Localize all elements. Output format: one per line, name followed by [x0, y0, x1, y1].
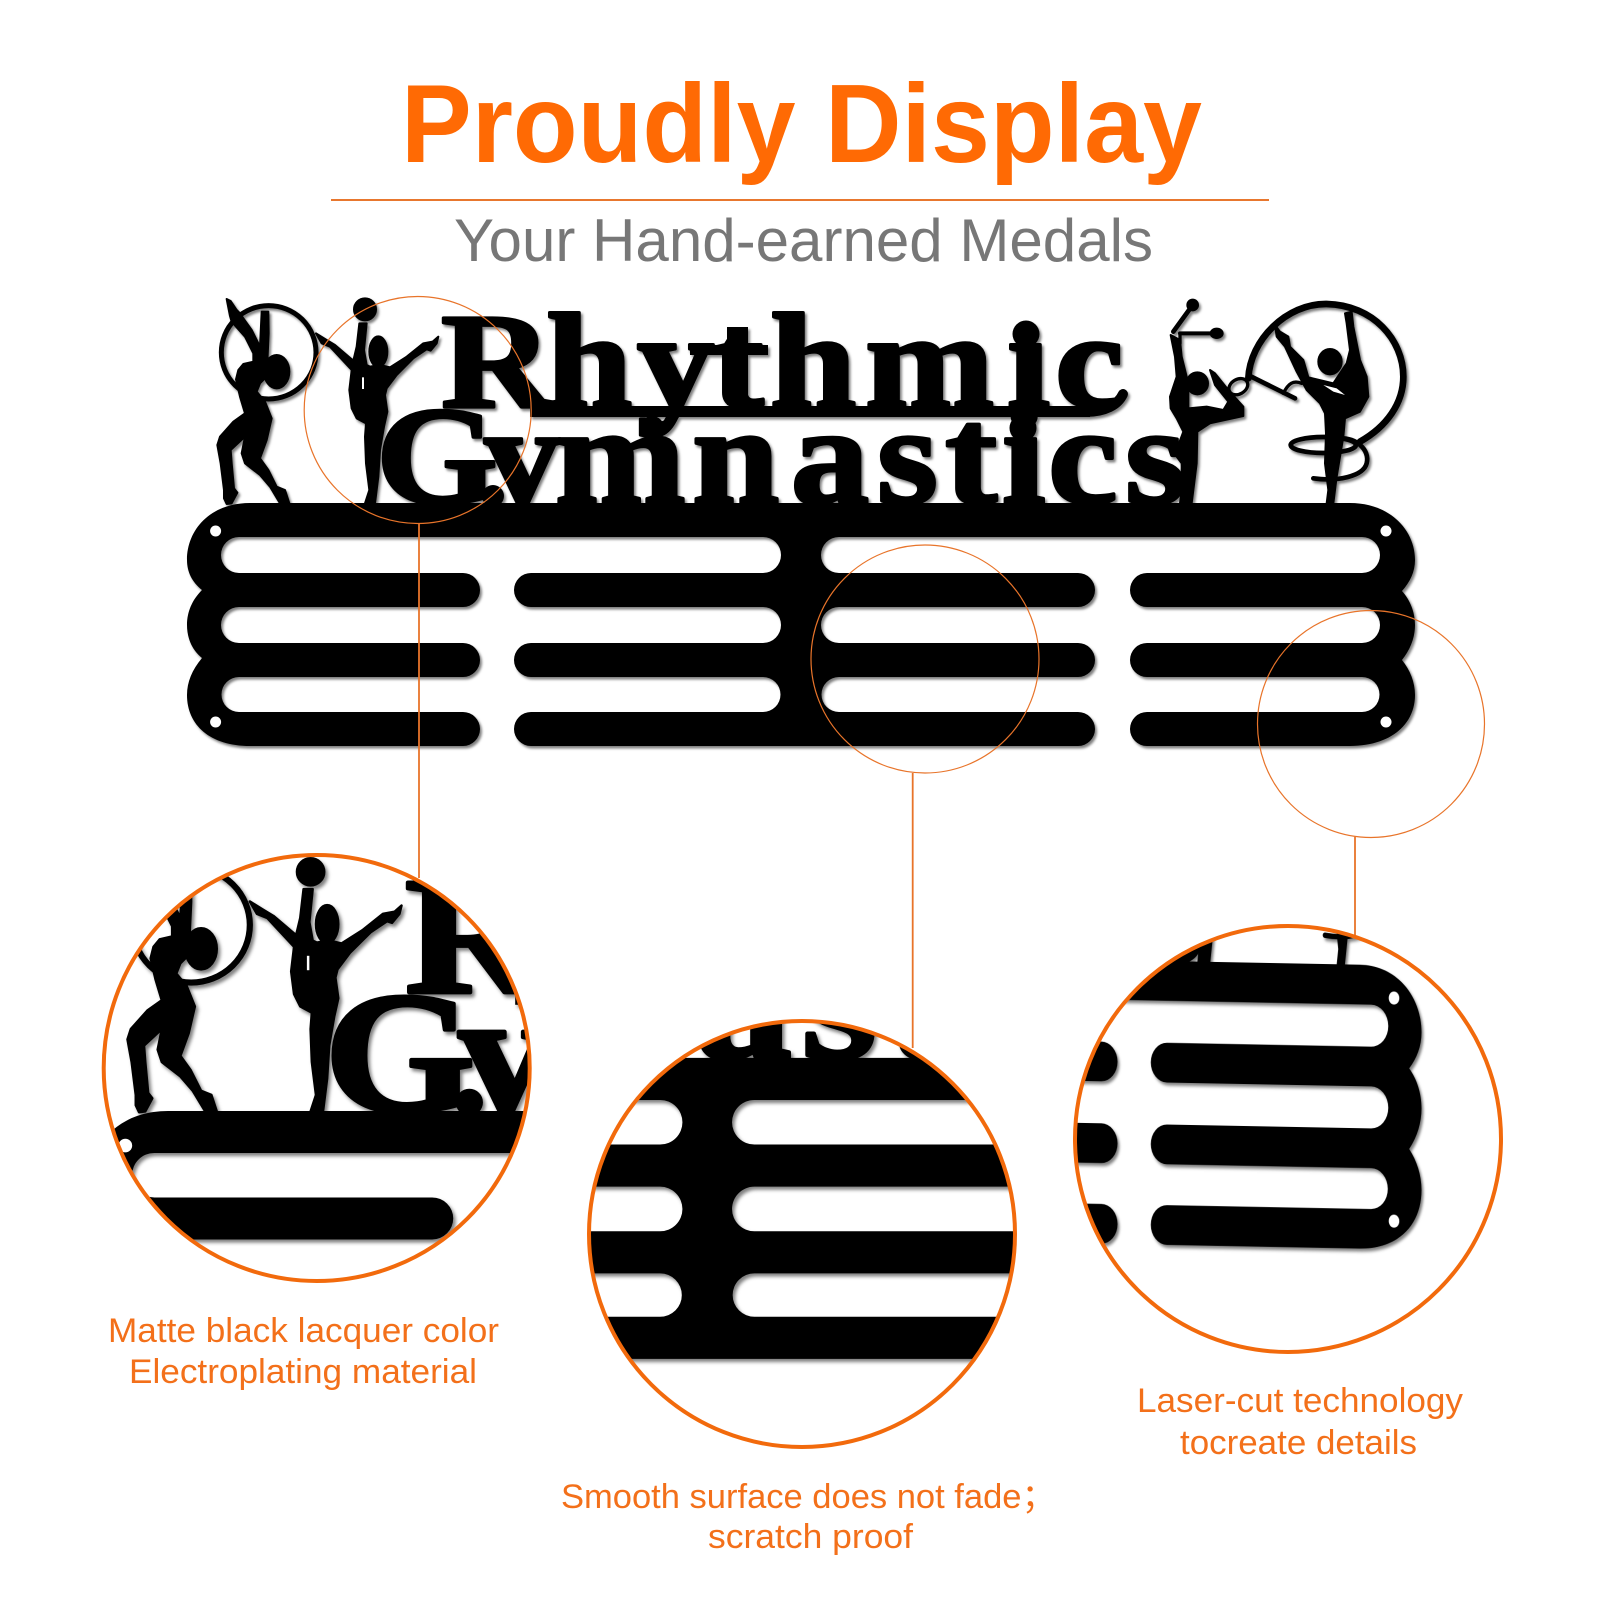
zoom circle: laser-cut edge: Rhythmic — [496, 695, 1145, 884]
caption: matte black: Electroplating material — [129, 1353, 477, 1391]
caption: smooth surface — [561, 1478, 1056, 1556]
medal hanger product image: Rhythmic — [441, 286, 1124, 437]
callout: circle and leader line, bars detail — [811, 545, 1039, 1048]
subtitle: Your Hand-earned Medals — [454, 207, 1153, 274]
callout: circle and leader line, edge detail — [1258, 610, 1484, 937]
medal hanger product image — [187, 286, 1415, 746]
zoom circle: smooth surface: Gymnastics — [180, 903, 1185, 1095]
title divider line — [331, 199, 1269, 201]
zoom circle: laser-cut edge — [1073, 924, 1503, 1354]
caption: matte black — [108, 1312, 499, 1391]
caption: smooth surface: scratch proof — [708, 1518, 914, 1556]
zoom circle: matte black finish: Rhythmic — [405, 844, 1251, 1030]
zoom circle: laser-cut edge: Gymnastics — [434, 802, 1204, 997]
caption: laser-cut — [1137, 1382, 1463, 1462]
callout: circle and leader line, gymnasts detail — [304, 296, 531, 878]
zoom circle: matte black finish — [102, 853, 532, 1283]
medal hanger product image: Gymnastics — [376, 380, 1186, 534]
zoom circle: smooth surface — [587, 1019, 1017, 1449]
caption: laser-cut: tocreate details — [1180, 1424, 1417, 1462]
zoom circle: smooth surface: Rhythmic — [261, 790, 1107, 976]
title: Proudly Display — [401, 62, 1202, 186]
caption: matte black: Matte black lacquer color — [108, 1312, 499, 1350]
caption: laser-cut: Laser-cut technology — [1137, 1382, 1463, 1420]
caption: smooth surface: Smooth surface does not fade； — [561, 1478, 1056, 1516]
zoom circle: matte black finish: Gymnastics — [324, 957, 1329, 1149]
